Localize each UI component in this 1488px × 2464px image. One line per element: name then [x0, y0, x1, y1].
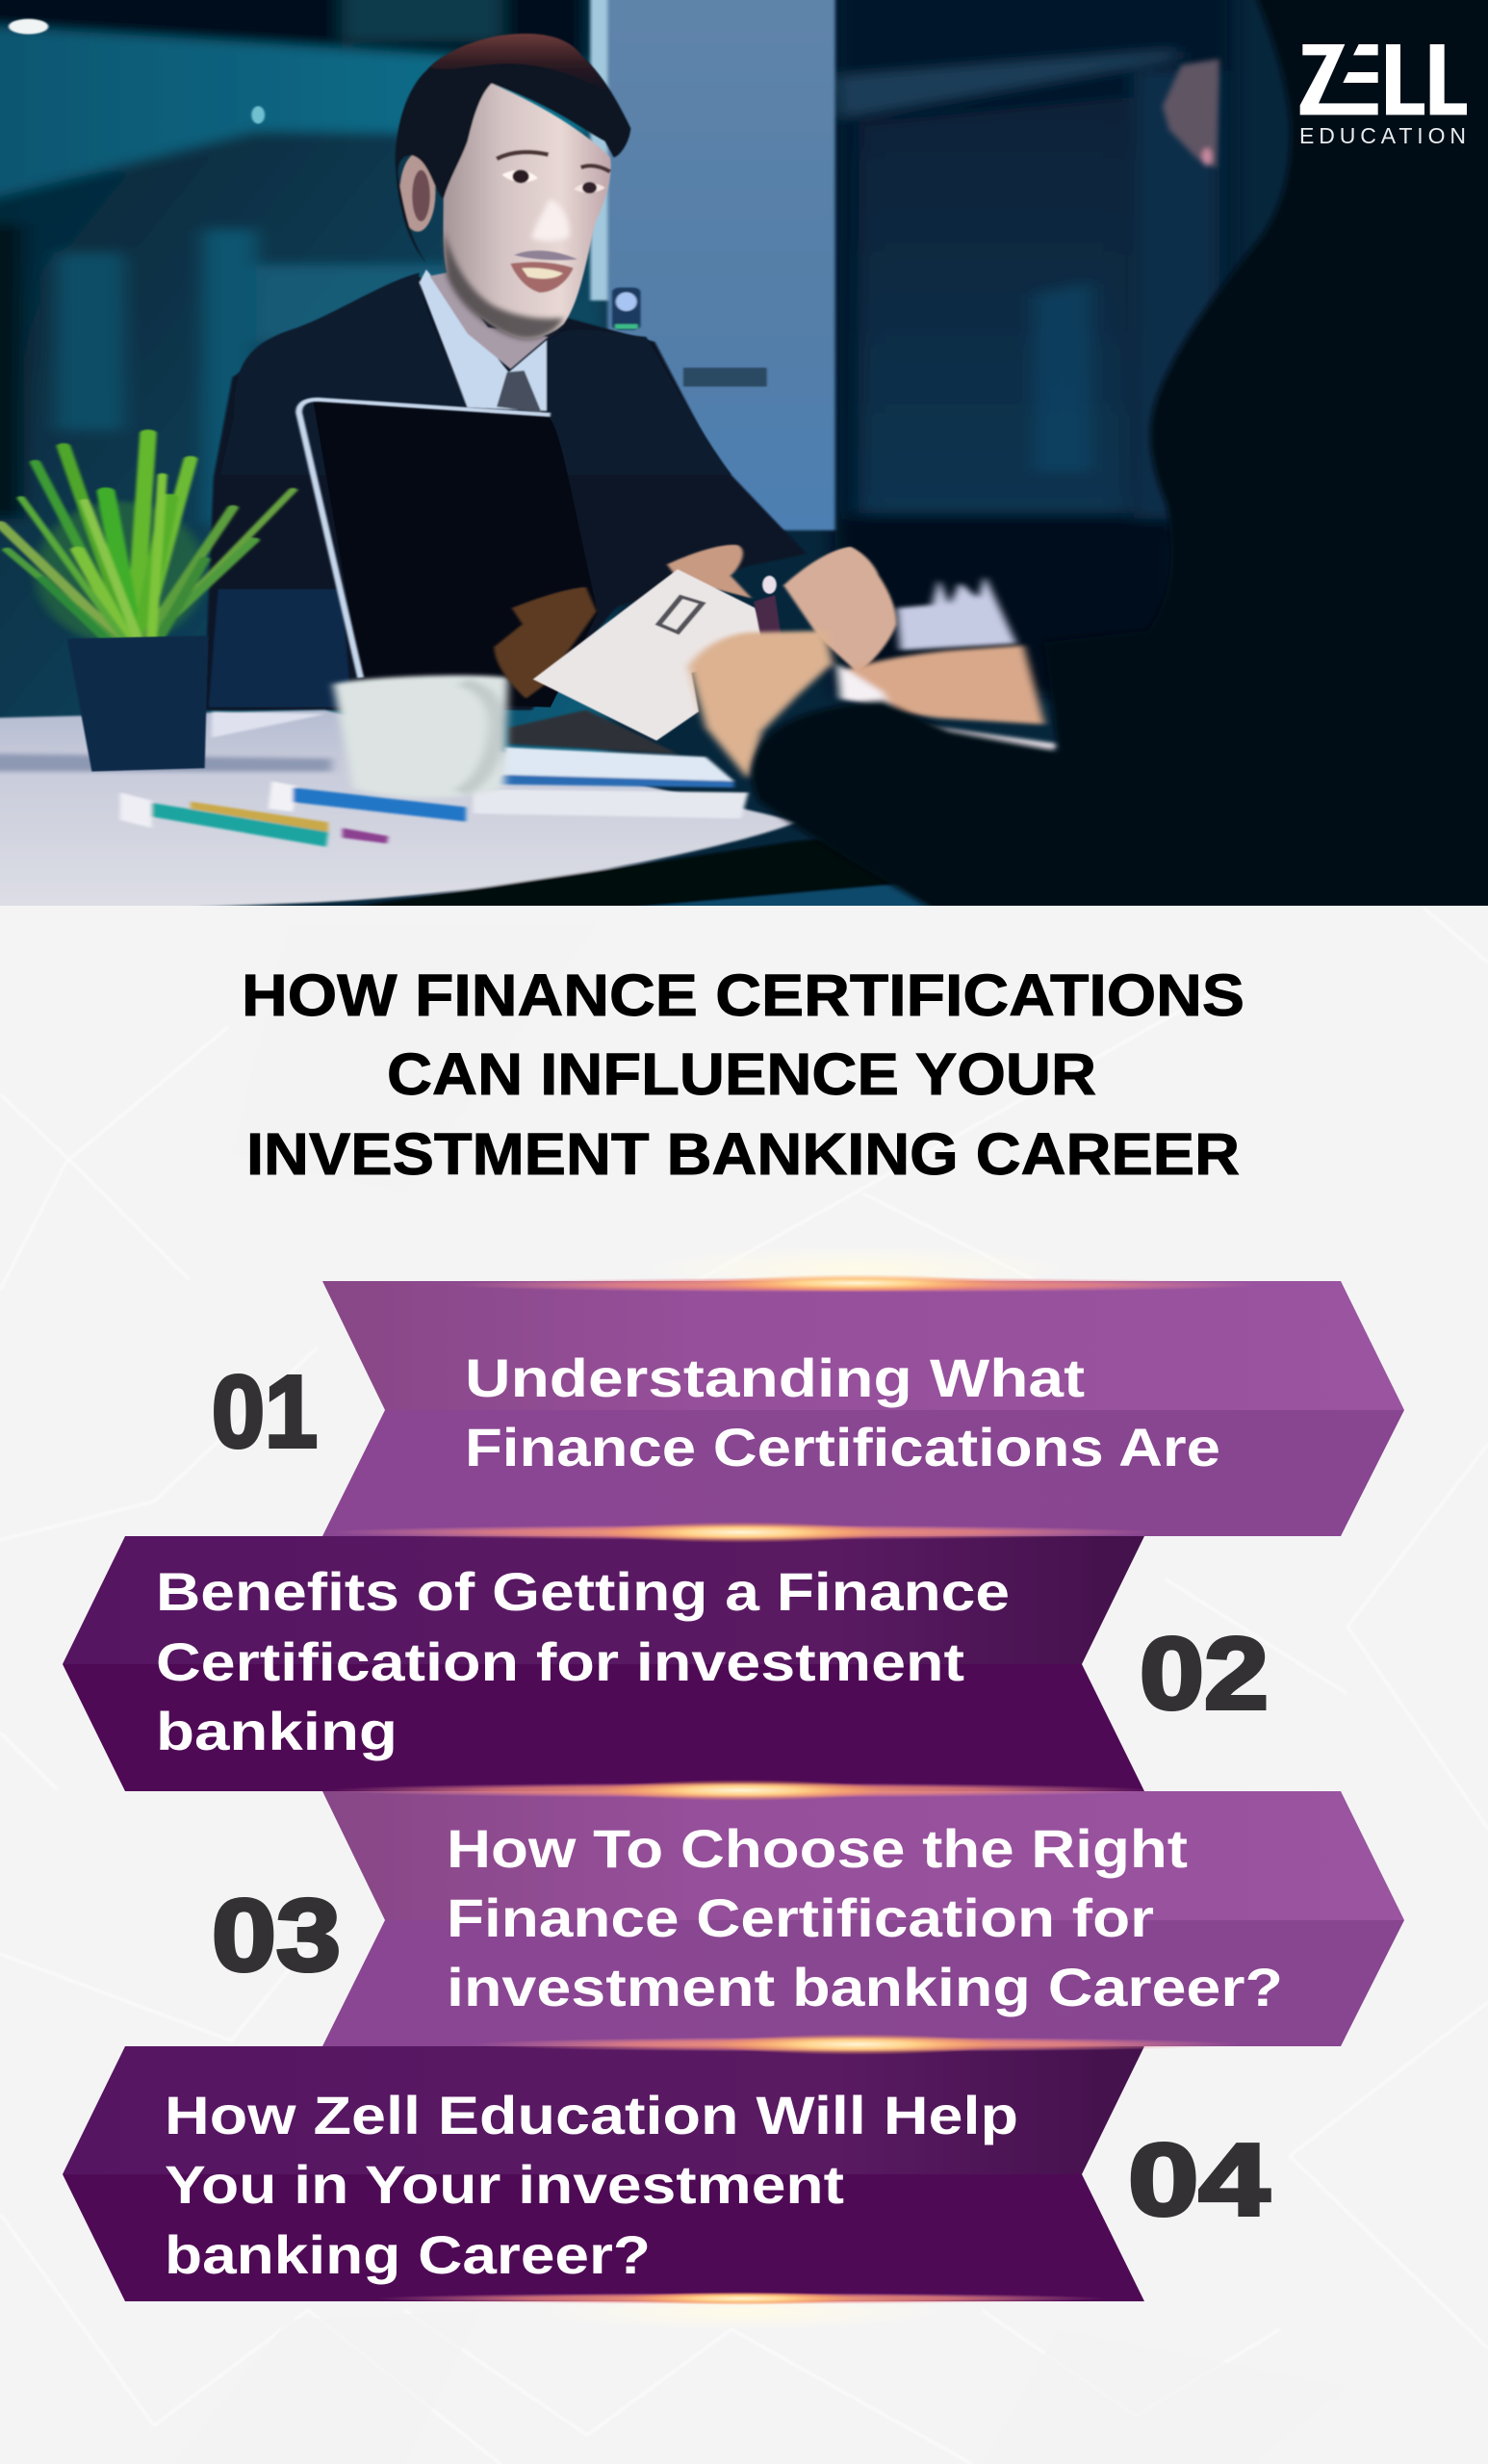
text 03 — [447, 1818, 1283, 2017]
pens and notebook — [120, 782, 466, 847]
text 03: How To Choose the Right — [447, 1818, 1188, 1879]
banner 02: benefits of certification — [63, 1536, 1269, 1791]
man: head and shoulders — [220, 34, 731, 475]
ceiling lamp and wall lights — [9, 19, 767, 387]
centre wall — [590, 0, 835, 530]
text 02: Certification for investment — [156, 1631, 964, 1692]
text 02: banking — [156, 1701, 398, 1761]
light flares on banner edges — [327, 1245, 1261, 2331]
plant pot — [67, 635, 208, 771]
banner 01: understanding finance certifications — [212, 1281, 1404, 1536]
beard — [444, 231, 564, 339]
pen in hand — [753, 575, 782, 635]
table — [0, 710, 988, 915]
laptop base — [473, 710, 748, 818]
number 04: 04 — [1128, 2123, 1270, 2237]
table, plant, hands and desk objects — [0, 433, 1059, 915]
text 04: How Zell Education Will Help — [165, 2085, 1018, 2145]
laptop screen — [299, 399, 598, 707]
bottles — [896, 576, 1016, 650]
man's hand, reflected in laptop — [494, 587, 597, 699]
text 02: Benefits of Getting a Finance — [156, 1561, 1010, 1622]
banner 03: choosing the right certification — [212, 1791, 1404, 2046]
text 03: Finance Certification for — [447, 1887, 1154, 1948]
text 01: Finance Certifications Are — [465, 1417, 1220, 1477]
title — [242, 962, 1244, 1187]
eyes and brows — [497, 152, 549, 159]
office background — [0, 0, 1234, 766]
woman: hair, face and dark jacket — [752, 0, 1488, 919]
text 02 — [156, 1561, 1010, 1761]
number 02: 02 — [1140, 1617, 1269, 1731]
mouth — [510, 262, 574, 293]
photo: interview scene — [0, 0, 1488, 919]
logo: Zell Education — [1299, 44, 1467, 148]
man: body and jacket — [204, 277, 807, 710]
coffee mug — [333, 676, 508, 798]
woman's hands — [688, 630, 1059, 780]
number 03: 03 — [212, 1879, 341, 1992]
title: INVESTMENT BANKING CAREER — [246, 1121, 1240, 1187]
text 01: Understanding What — [465, 1348, 1085, 1408]
number 01: 01 — [212, 1355, 318, 1469]
nose and moustache — [531, 199, 569, 241]
text 01 — [465, 1348, 1220, 1477]
text 04 — [165, 2085, 1018, 2285]
white document — [533, 569, 769, 741]
text 04: You in Your investment — [165, 2154, 844, 2215]
man's hand behind document — [667, 545, 752, 599]
banner 04: how Zell Education helps — [63, 2046, 1270, 2301]
text 04: banking Career? — [165, 2224, 651, 2285]
title: CAN INFLUENCE YOUR — [387, 1041, 1096, 1107]
logo: Zell Education: EDUCATION — [1299, 123, 1466, 148]
title: HOW FINANCE CERTIFICATIONS — [242, 962, 1244, 1028]
text 03: investment banking Career? — [447, 1957, 1283, 2017]
plant — [0, 433, 293, 644]
